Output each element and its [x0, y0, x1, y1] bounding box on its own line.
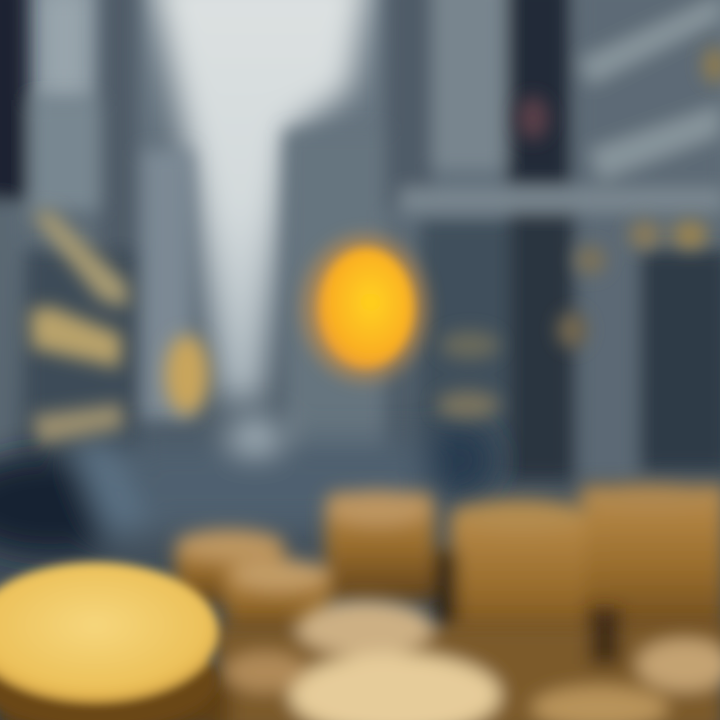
large gold coin	[0, 562, 219, 720]
right buildings	[285, 0, 720, 480]
floating yellow coin	[303, 236, 427, 380]
building lights	[30, 47, 720, 445]
coin stacks, foreground	[0, 600, 720, 720]
street	[0, 419, 495, 555]
sky	[30, 0, 370, 400]
coin stacks, back row	[175, 483, 720, 675]
left buildings	[0, 0, 192, 460]
